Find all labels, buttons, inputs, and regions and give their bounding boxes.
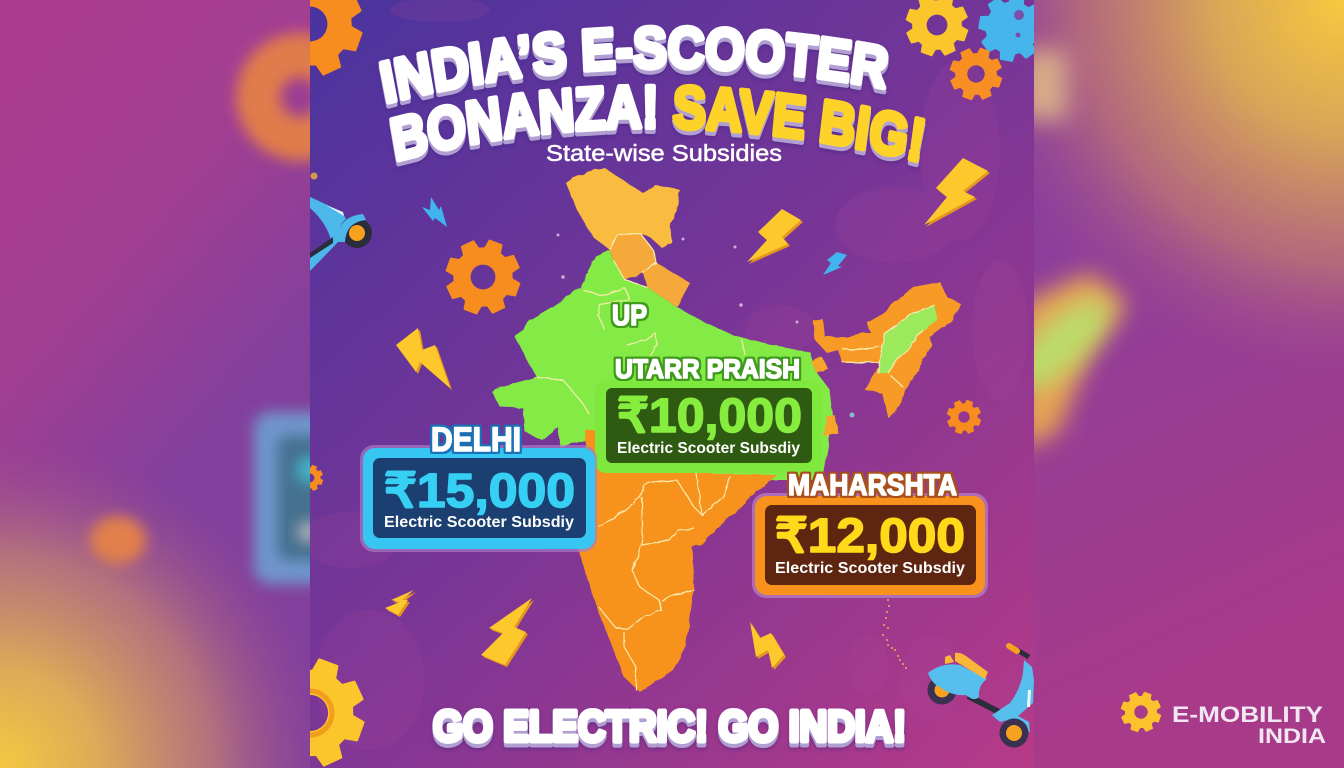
amount: ₹12,000	[775, 510, 965, 563]
map: northern green states	[492, 250, 833, 480]
panel: Delhi	[360, 421, 597, 552]
map: state borders	[537, 233, 935, 690]
map of India	[492, 168, 960, 692]
icon: blue bolt right	[823, 252, 847, 275]
icon: bolt upper right	[924, 158, 988, 225]
icon: gear small right	[946, 400, 982, 434]
icon: gear blue top-right	[978, 0, 1034, 62]
title	[378, 24, 926, 170]
blurred background right	[998, 0, 1344, 768]
icon: gear orange mid-left	[446, 240, 520, 314]
brand name line one: E-MOBILITY	[1172, 702, 1323, 727]
map: Tripura	[812, 357, 828, 372]
blurred background left	[0, 0, 344, 768]
lightning bolts	[385, 158, 988, 668]
state name: DELHI	[431, 421, 521, 459]
card inner	[373, 458, 586, 538]
card frame	[755, 496, 985, 595]
icon: scooter bottom-right	[928, 646, 1034, 748]
map: east coast fragment	[823, 415, 838, 437]
label: UP: UP	[612, 300, 647, 332]
map: Uttarakhand region	[610, 233, 690, 307]
amount: ₹10,000	[617, 390, 802, 443]
subtitle: State-wise Subsidies	[546, 140, 782, 166]
description: Electric Scooter Subsdiy	[384, 514, 574, 531]
dotted scooter trail	[882, 599, 907, 669]
map: Jammu and Kashmir	[566, 168, 680, 250]
card inner	[765, 505, 976, 585]
brand name line two: INDIA	[1258, 725, 1326, 748]
panel: Maharashtra	[752, 469, 988, 598]
map: Assam	[878, 305, 937, 373]
gears and scooter decorations	[310, 0, 1034, 766]
central panel background	[310, 0, 1034, 768]
icon: bolt left	[396, 328, 450, 388]
description: Electric Scooter Subsdiy	[617, 440, 800, 457]
amount: ₹15,000	[384, 465, 575, 518]
icon: gear yellow top-right	[906, 0, 968, 56]
icon: bolt bottom right	[750, 622, 784, 668]
icon: bolt bottom big	[481, 598, 532, 665]
card glow	[360, 445, 597, 552]
footer slogan: GO ELECTRIC! GO INDIA!	[433, 702, 906, 751]
map: north-east states	[813, 282, 960, 418]
card inner	[606, 388, 812, 463]
icon: bolt bottom small	[385, 590, 414, 615]
icon: blue bolt left	[422, 197, 447, 227]
icon: gear yellow bottom-left	[310, 658, 365, 766]
description: Electric Scooter Subsdiy	[775, 560, 965, 577]
icon: scooter left	[310, 172, 372, 271]
sparkles	[556, 234, 854, 418]
card frame	[595, 381, 822, 473]
card frame	[363, 448, 595, 549]
title line one: INDIA’S E-SCOOTER	[378, 24, 889, 110]
title line two: BONANZA! SAVE BIG!	[389, 84, 926, 170]
state name: UTARR PRAISH	[615, 354, 800, 384]
map: southern orange states	[578, 430, 777, 692]
icon: gear orange upper-right	[950, 48, 1002, 100]
card glow	[752, 493, 988, 598]
icon: bolt centre right	[747, 209, 801, 262]
state name: MAHARSHTA	[788, 469, 957, 502]
icon: logo gear	[1116, 687, 1166, 737]
logo	[1116, 687, 1326, 748]
icon: gear small left edge	[310, 464, 324, 491]
background blobs	[310, 0, 976, 656]
panel: Uttar Pradesh	[595, 354, 822, 473]
icon: gear orange top-left	[310, 0, 362, 76]
